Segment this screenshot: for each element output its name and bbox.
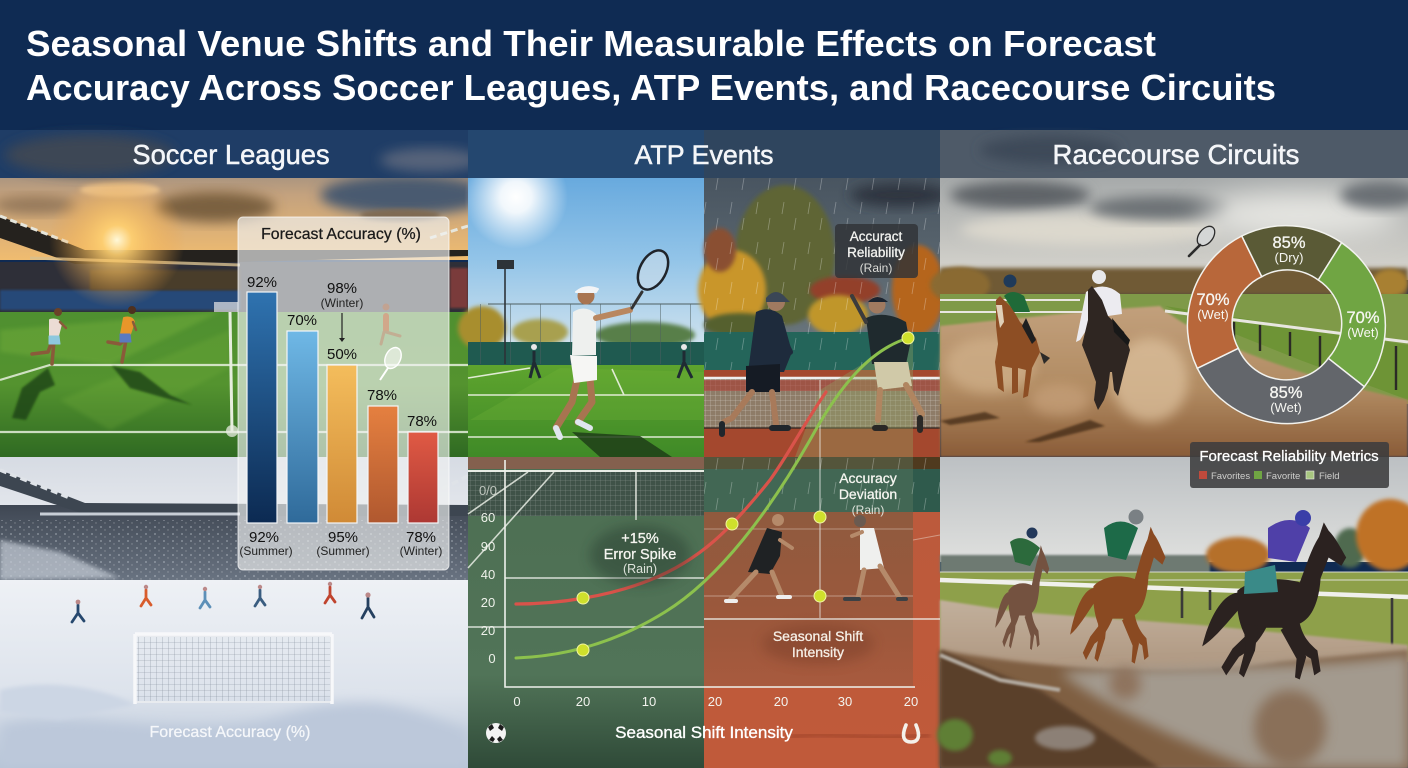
segment: 85% wet grey <box>1197 348 1364 424</box>
donut labels: (Wet) <box>1347 325 1379 340</box>
y axis labels: 40 <box>481 567 495 582</box>
y axis labels: 90 <box>481 539 495 554</box>
section banner: ATP events <box>468 130 940 178</box>
x axis labels: 20 <box>576 694 590 709</box>
icon: tennis player dark shirt <box>852 296 922 430</box>
legend: forecast reliability metrics: Forecast Reliability Metrics <box>1199 448 1379 465</box>
icon: muddy racehorse dark <box>1202 510 1346 679</box>
icon: faded runner <box>381 304 400 344</box>
y axis labels: 20 <box>481 623 495 638</box>
callout: error spike: +15% <box>621 531 659 547</box>
section banner: racecourse circuits: Racecourse Circuits <box>1053 139 1299 170</box>
donut labels: (Wet) <box>1270 400 1302 415</box>
icon: muddy racehorse chestnut <box>1070 510 1166 664</box>
bar value labels: (Summer) <box>239 544 293 558</box>
callout: accuracy reliability: Accuract <box>850 229 903 244</box>
callout: error spike <box>590 525 690 585</box>
bar value labels: 78% <box>367 387 397 404</box>
bar value labels: 70% <box>287 312 317 329</box>
legend: forecast reliability metrics: Favorites <box>1211 471 1250 482</box>
segment: 85% dry <box>1242 226 1342 280</box>
icon: horseshoe <box>904 725 918 742</box>
x axis labels: 20 <box>708 694 722 709</box>
section banner: racecourse circuits <box>940 130 1408 178</box>
x axis labels <box>513 694 918 709</box>
callout: accuracy deviation: Deviation <box>839 486 897 502</box>
icon: clay player dark <box>726 514 792 601</box>
donut labels: 85% <box>1272 234 1306 252</box>
x axis labels: 30 <box>838 694 852 709</box>
callout: accuracy reliability: Reliability <box>847 245 905 260</box>
y axis labels: 0/0 <box>479 483 497 498</box>
panel: racecourse dry photo <box>930 130 1408 457</box>
donut labels: 70% <box>1346 309 1380 327</box>
legend: forecast reliability metrics: Favorite <box>1266 471 1300 482</box>
bar value labels: 78% <box>406 529 436 546</box>
icon: muddy racehorse small <box>995 528 1049 650</box>
donut labels: (Wet) <box>1197 307 1229 322</box>
icon: racehorse and jockey right <box>1076 270 1130 410</box>
icon: soccer ball <box>486 723 506 743</box>
icon: tennis player with racket <box>556 245 674 437</box>
panel: racecourse muddy photo <box>937 457 1408 768</box>
y axis labels: 60 <box>481 510 495 525</box>
caption: forecast accuracy winter: Forecast Accuracy (%) <box>150 724 310 741</box>
axis title: seasonal shift intensity: Seasonal Shift Intensity <box>615 723 793 742</box>
icon: racket donut <box>1189 223 1218 256</box>
bar value labels: 50% <box>327 346 357 363</box>
panel: soccer winter photo <box>0 457 468 768</box>
panel: tennis sunny photo <box>458 130 704 457</box>
gridlines <box>468 380 940 687</box>
y axis labels: 20 <box>481 595 495 610</box>
icon: soccer player white <box>32 308 66 364</box>
donut labels: 85% <box>1269 384 1303 402</box>
tennis ball markers <box>577 332 914 656</box>
icon: tennis racket white <box>380 345 404 380</box>
callout: error spike: (Rain) <box>623 562 657 576</box>
bar value labels: 92% <box>249 529 279 546</box>
callout: accuracy deviation <box>839 470 897 517</box>
icon: soccer player orange <box>108 306 136 362</box>
x axis labels: 20 <box>904 694 918 709</box>
x axis labels: 0 <box>513 694 521 709</box>
legend: forecast reliability metrics <box>1190 442 1389 488</box>
bar value labels: 78% <box>407 413 437 430</box>
icon: racehorse and jockey left <box>995 274 1050 398</box>
callout: accuracy deviation: (Rain) <box>852 503 884 517</box>
chart title: Forecast Accuracy (%) <box>261 226 421 243</box>
x axis labels: 20 <box>774 694 788 709</box>
donut labels: (Dry) <box>1275 250 1303 265</box>
arrow: winter drop <box>339 313 345 342</box>
callout: seasonal shift intensity: Intensity <box>792 644 844 660</box>
callout: seasonal shift intensity <box>762 624 874 664</box>
bar value labels: (Winter) <box>321 296 363 310</box>
panel: soccer summer photo <box>0 130 490 457</box>
bar value labels: 95% <box>328 529 358 546</box>
panel: tennis rain photo <box>698 130 950 457</box>
section banner: ATP events: ATP Events <box>634 140 774 170</box>
segment: 70% wet green <box>1318 243 1385 387</box>
section banner: soccer leagues <box>0 130 480 178</box>
icon: winter soccer players <box>72 582 374 622</box>
bar value labels: 98% <box>327 280 357 297</box>
donut labels <box>1196 234 1380 415</box>
panel: forecast accuracy bar chart <box>238 217 449 570</box>
panel: tennis green court chart background <box>468 457 704 768</box>
callout: accuracy deviation: Accuracy <box>839 470 897 486</box>
bar value labels: (Winter) <box>400 544 442 558</box>
y axis labels <box>479 483 497 666</box>
title <box>26 23 1276 108</box>
panel: clay court chart background <box>704 457 940 768</box>
chart: accuracy curves <box>468 332 940 709</box>
bar value labels: 92% <box>247 274 277 291</box>
x axis labels: 10 <box>642 694 656 709</box>
y axis labels: 0 <box>488 651 496 666</box>
header bar <box>0 0 1408 130</box>
callout: accuracy reliability <box>835 224 918 278</box>
bars <box>247 292 438 523</box>
segment: 70% wet orange <box>1187 236 1262 368</box>
legend: forecast reliability metrics: Field <box>1319 471 1340 482</box>
bar value labels: (Summer) <box>316 544 370 558</box>
chart: forecast reliability donut <box>1187 226 1385 424</box>
green curve <box>516 338 908 658</box>
donut labels: 70% <box>1196 291 1230 309</box>
callout: accuracy reliability: (Rain) <box>860 261 892 275</box>
callout: error spike: Error Spike <box>604 547 676 563</box>
section banner: soccer leagues: Soccer Leagues <box>132 139 330 170</box>
red curve <box>516 392 826 604</box>
icon: tennis player rain jacket <box>722 292 792 434</box>
title: Seasonal Venue Shifts and Their Measurable Effects on Forecast <box>26 23 1156 64</box>
callout: seasonal shift intensity: Seasonal Shift <box>773 628 863 644</box>
bar value labels <box>239 274 442 558</box>
icon: clay player white <box>845 515 906 599</box>
title: Accuracy Across Soccer Leagues, ATP Events, and Racecourse Circuits <box>26 67 1276 108</box>
